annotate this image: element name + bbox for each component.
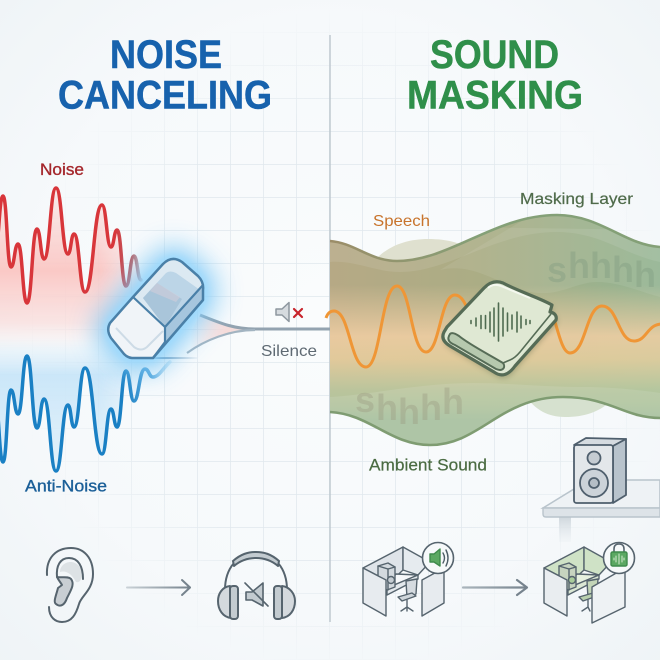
icon: loudspeaker on desk <box>543 438 660 542</box>
label: masking layer: Masking Layer <box>520 191 634 208</box>
icon: eraser <box>108 259 203 358</box>
icon: open cubicle <box>363 542 454 616</box>
grid backdrop <box>66 50 620 630</box>
waveform on cloth <box>471 303 530 341</box>
label: silence: Silence <box>261 343 317 360</box>
red noise fill <box>0 190 137 338</box>
shhhh top: shhhh <box>547 245 656 295</box>
arrow: cubicle to masked cubicle <box>463 580 527 595</box>
blue anti-noise fill <box>0 347 140 469</box>
title: noise canceling <box>58 33 272 118</box>
speech wave right <box>552 306 660 353</box>
center divider <box>329 35 331 622</box>
speaker cabinet <box>574 438 626 503</box>
shhhh bottom: shhhh <box>355 379 464 432</box>
speech bump behind band <box>373 239 475 275</box>
panel: masking band <box>326 200 660 460</box>
title: noise canceling: NOISE <box>110 33 222 77</box>
label: ambient sound: Ambient Sound <box>369 456 487 474</box>
silence output lines <box>153 315 330 358</box>
label: speech: Speech <box>373 213 430 230</box>
title: sound masking <box>407 33 583 118</box>
arrow: ear to headphones <box>127 580 190 595</box>
speech wave left <box>326 286 470 367</box>
icon: muted speaker <box>276 302 302 322</box>
icon: muted headphones <box>218 552 295 619</box>
noise canceling waves <box>0 188 170 471</box>
desk <box>543 480 660 542</box>
title: sound masking: MASKING <box>407 74 583 118</box>
title: sound masking: SOUND <box>430 33 559 77</box>
label: noise: Noise <box>40 161 84 179</box>
icon: ear <box>47 548 93 622</box>
icon: masked cubicle <box>544 542 634 623</box>
red noise wave <box>0 188 141 303</box>
blue anti-noise wave <box>0 356 170 471</box>
title: noise canceling: CANCELING <box>58 74 272 118</box>
label: anti-noise: Anti-Noise <box>25 478 107 496</box>
ambient bump behind band <box>525 385 610 417</box>
icon: folded cloth with waveform <box>443 282 557 378</box>
